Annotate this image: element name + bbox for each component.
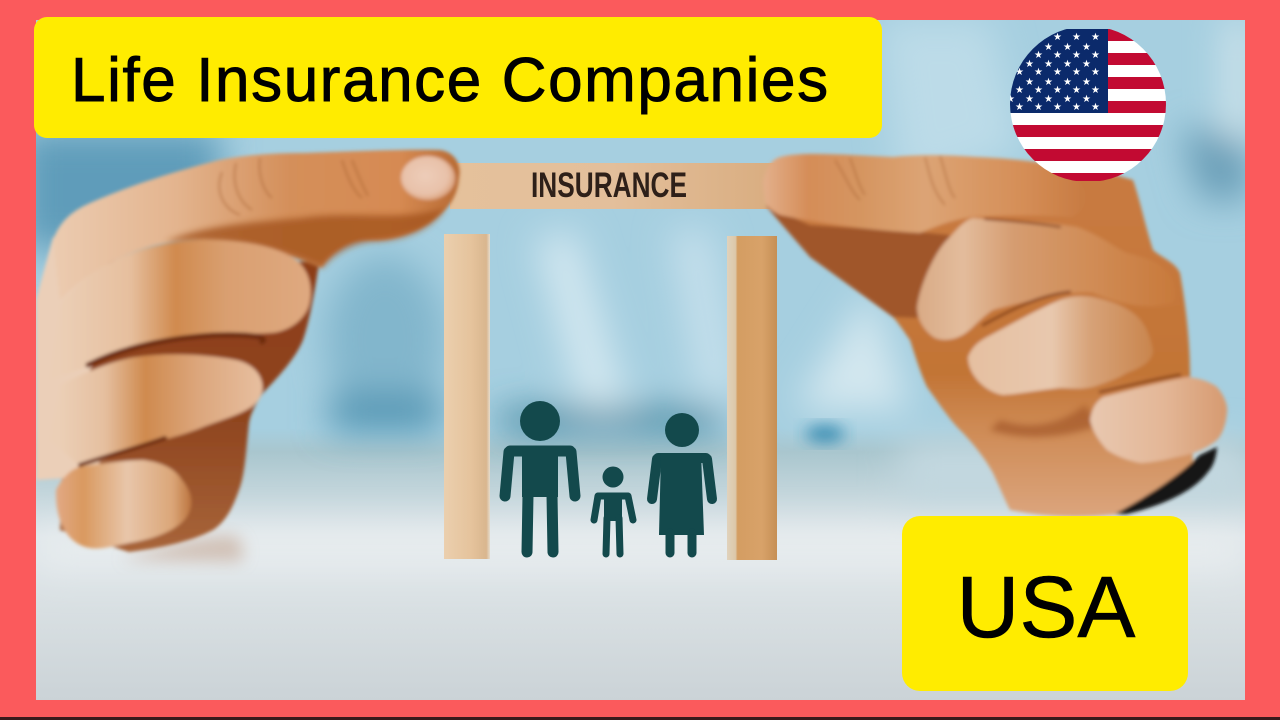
wooden post: right — [727, 236, 777, 560]
US flag circle: ★★★★ — [1025, 77, 1091, 88]
finger 2 — [80, 238, 314, 366]
finger creases — [80, 335, 264, 465]
finger 4 — [1090, 377, 1227, 463]
finger 2 — [917, 218, 1175, 340]
knuckle creases — [219, 158, 368, 215]
wooden post: left — [444, 234, 490, 559]
US flag circle: ★★★★★ — [1015, 85, 1100, 96]
insurance stick — [450, 163, 775, 209]
US flag circle: ★★★★ — [1034, 50, 1100, 61]
USA label: USA — [957, 559, 1135, 656]
palm — [60, 260, 319, 552]
index finger — [53, 150, 460, 300]
family figures — [505, 401, 712, 554]
finger 3 — [73, 352, 266, 464]
left hand — [36, 150, 460, 552]
US flag circle: ★★★★★ — [1015, 102, 1100, 113]
figure: child — [594, 466, 633, 554]
finger 4 — [56, 460, 191, 549]
US flag circle: ★★★★ — [1025, 59, 1091, 70]
US flag circle: ★★★★★ — [1006, 94, 1091, 105]
US flag circle: ★★★ — [1044, 42, 1091, 53]
palm — [780, 165, 1193, 516]
figure: father — [505, 401, 575, 552]
sleeve shadow — [1115, 447, 1217, 514]
title text: Life Insurance Companies — [71, 46, 830, 115]
web shadow — [765, 205, 950, 318]
title badge — [34, 17, 882, 138]
right hand — [763, 154, 1227, 516]
finger creases — [983, 219, 1180, 392]
US flag circle: ★★★★★ — [1015, 67, 1100, 78]
nail — [401, 156, 455, 200]
figure: mother — [652, 413, 712, 553]
stick label: INSURANCE — [531, 166, 687, 205]
index finger — [763, 154, 1087, 233]
US flag circle: ★★★ — [1053, 32, 1100, 43]
bottom edge line — [0, 717, 1280, 720]
US flag circle — [1006, 26, 1168, 182]
finger 3 — [968, 296, 1153, 395]
index creases — [835, 156, 955, 205]
index underside shadow — [165, 208, 445, 268]
back of hand — [36, 236, 102, 482]
USA badge — [902, 516, 1188, 691]
